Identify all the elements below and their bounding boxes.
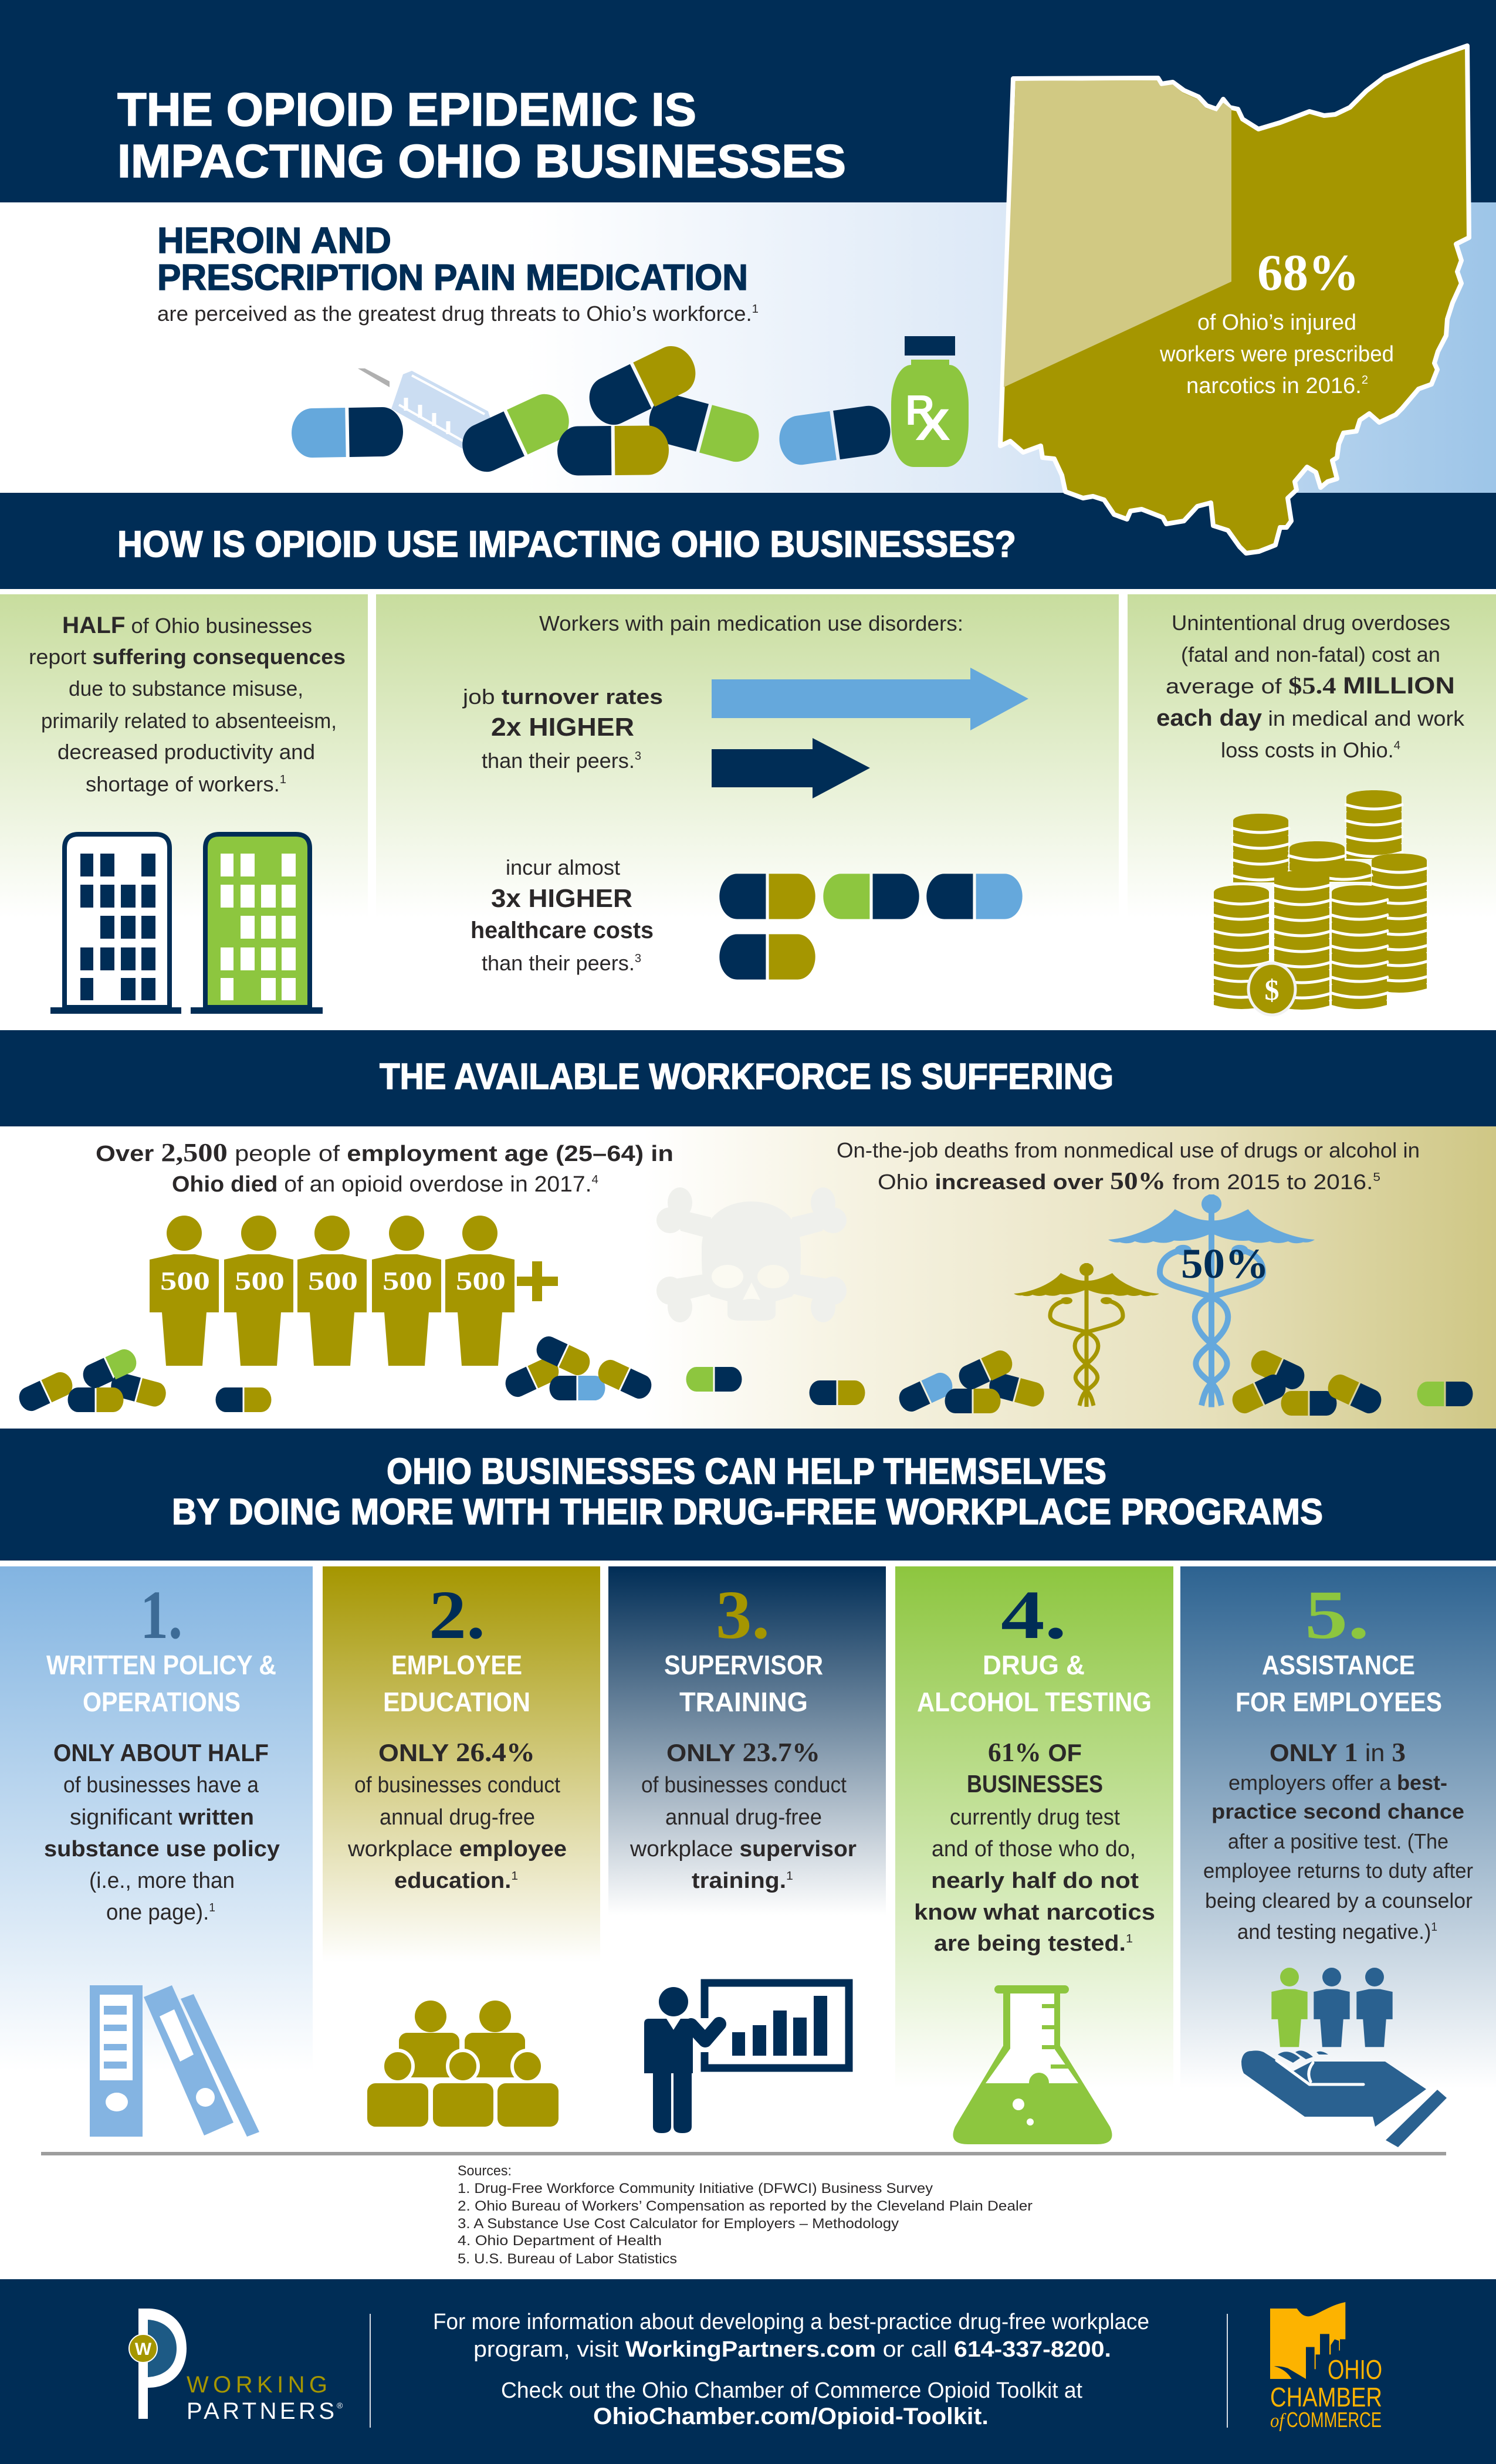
text: contact information: For more information about developing a best-practice drug-free workplace bbox=[433, 2310, 1149, 2334]
logo: Working Partners bbox=[129, 2309, 343, 2424]
logo: Working Partners: PARTNERS bbox=[187, 2398, 334, 2424]
background: impact heading band bbox=[0, 493, 1496, 589]
logo: Ohio Chamber of Commerce: OHIO bbox=[1328, 2354, 1382, 2385]
number: 3: 3. bbox=[716, 1576, 770, 1653]
text: on-the-job deaths: Ohio increased over 50% from 2015 to 2016. bbox=[878, 1168, 1349, 1195]
text: half of Ohio businesses bbox=[29, 612, 346, 796]
text: only about half: ONLY ABOUT HALF bbox=[53, 1739, 269, 1766]
text: sources: 2. Ohio Bureau of Workers’ Compensation as reported by the Cleveland Plain Dealer bbox=[458, 2198, 1033, 2214]
logo: Ohio Chamber of Commerce: COMMERCE bbox=[1287, 2408, 1382, 2432]
text: contact information: Check out the Ohio Chamber of Commerce Opioid Toolkit at bbox=[501, 2378, 1082, 2403]
text: only 23.7 percent: ONLY 23.7% bbox=[666, 1737, 820, 1767]
text: 61 percent of businesses: 61% OF bbox=[988, 1737, 1082, 1767]
text: contact information: OhioChamber.com/Opioid-Toolkit. bbox=[593, 2404, 989, 2429]
text: sources: 4. Ohio Department of Health bbox=[458, 2233, 662, 2249]
icon: prescription bottle: R bbox=[905, 387, 935, 434]
text: overdose cost: each day in medical and work bbox=[1156, 705, 1465, 731]
text: only 23.7 percent: workplace supervisor bbox=[629, 1837, 857, 1861]
heading: how is opioid use impacting: HOW IS OPIOID USE IMPACTING OHIO BUSINESSES? bbox=[117, 524, 1016, 565]
icon: pill beside bottle bbox=[776, 403, 893, 468]
logo: Ohio Chamber of Commerce bbox=[1270, 2302, 1382, 2432]
text: only 23.7 percent: annual drug-free bbox=[665, 1805, 822, 1830]
text: turnover rates: 2x HIGHER bbox=[491, 713, 634, 742]
heading: employee education: EDUCATION bbox=[383, 1687, 530, 1717]
logo: Working Partners: W bbox=[135, 2340, 152, 2359]
text: over 2,500 people died: 4 bbox=[592, 1173, 598, 1186]
title bbox=[117, 83, 846, 187]
heading: written policy bbox=[46, 1650, 276, 1717]
text: on-the-job deaths: 5 bbox=[1373, 1171, 1380, 1184]
heading: Ohio businesses can help themselves: BY DOING MORE WITH THEIR DRUG-FREE WORKPLACE PROGRAMS bbox=[172, 1492, 1323, 1532]
text: turnover rates: job turnover rates bbox=[462, 685, 663, 709]
icon: three people on a hand bbox=[1241, 1968, 1447, 2147]
text: contact information: program, visit WorkingPartners.com or call 614-337-8200. bbox=[473, 2337, 1111, 2362]
text: only about half: of businesses have a bbox=[63, 1773, 259, 1798]
heading: drug and alcohol testing: ALCOHOL TESTING bbox=[917, 1687, 1152, 1717]
text: only 1 in 3: after a positive test. (The bbox=[1228, 1829, 1448, 1853]
background: workforce heading band bbox=[0, 1030, 1496, 1126]
map: Ohio 68 percent: of Ohio’s injured bbox=[1197, 310, 1356, 335]
text: over 2,500 people died: Over 2,500 people of employment age (25–64) in bbox=[96, 1138, 673, 1167]
number: 2: 2. bbox=[429, 1576, 485, 1653]
icon: group of pills bbox=[291, 339, 764, 479]
logo: Working Partners: WORKING bbox=[187, 2372, 327, 2398]
background: heroin section gradient bbox=[0, 202, 1496, 493]
map: Ohio 68 percent: 68% bbox=[1257, 245, 1359, 302]
text: 61 percent of businesses: 1 bbox=[1126, 1932, 1133, 1945]
text: half of Ohio businesses: report suffering consequences bbox=[29, 645, 346, 669]
text: overdose cost: average of $5.4 MILLION bbox=[1166, 672, 1455, 699]
text: only 1 in 3: practice second chance bbox=[1211, 1799, 1464, 1823]
text: 61 percent of businesses: and of those who do, bbox=[932, 1837, 1136, 1861]
heading: assistance for employees bbox=[1236, 1650, 1442, 1717]
icon: olive caduceus bbox=[1014, 1263, 1159, 1407]
icon: person 500 bbox=[224, 1216, 293, 1366]
text: only 26.4 percent: education. bbox=[394, 1869, 511, 1893]
map: Ohio 68 percent: 2 bbox=[1362, 374, 1368, 387]
map: Ohio 68 percent: narcotics in 2016. bbox=[1186, 374, 1361, 398]
text: healthcare costs: healthcare costs bbox=[471, 918, 654, 943]
text: sources: Sources: bbox=[458, 2163, 512, 2179]
logo: Working Partners: ® bbox=[337, 2401, 343, 2410]
heading: supervisor training bbox=[664, 1650, 823, 1717]
icon: laboratory flask bbox=[953, 1985, 1112, 2144]
text: 61 percent of businesses: currently drug test bbox=[950, 1805, 1120, 1830]
icon: person 500: 500 bbox=[383, 1267, 432, 1295]
heading: employee education: EMPLOYEE bbox=[391, 1650, 522, 1680]
text: turnover rates: 3 bbox=[635, 750, 641, 763]
divider right bbox=[1227, 2314, 1228, 2428]
text: sources: 5. U.S. Bureau of Labor Statistics bbox=[458, 2251, 677, 2267]
text: only 23.7 percent: training. bbox=[692, 1869, 786, 1893]
icon: scattered pills middle bbox=[502, 1333, 865, 1405]
text: only about half bbox=[44, 1739, 280, 1925]
heading: supervisor training: TRAINING bbox=[679, 1687, 808, 1717]
panel: 3 supervisor training bbox=[608, 1566, 886, 2133]
text: sources: 3. A Substance Use Cost Calculator for Employers – Methodology bbox=[458, 2216, 899, 2232]
chart: five people each representing 500 bbox=[150, 1216, 558, 1366]
icon: plus sign bbox=[517, 1261, 558, 1301]
divider line above sources bbox=[41, 2152, 1446, 2155]
text: only 23.7 percent bbox=[629, 1737, 857, 1893]
text: on-the-job deaths bbox=[837, 1138, 1420, 1195]
heading: heroin and prescription pain medication: HEROIN AND bbox=[157, 221, 391, 261]
text: only 1 in 3: and testing negative.) bbox=[1237, 1920, 1439, 1944]
text: turnover rates: than their peers. bbox=[482, 749, 634, 773]
text: overdose cost: (fatal and non-fatal) cost an bbox=[1181, 642, 1440, 666]
arrow: light blue long arrow bbox=[712, 668, 1028, 730]
icon: presenter at chart board bbox=[644, 1983, 849, 2133]
text: only 26.4 percent: ONLY 26.4% bbox=[378, 1737, 535, 1767]
icon: scattered pills far right bbox=[1228, 1347, 1473, 1417]
text: only 23.7 percent: of businesses conduct bbox=[641, 1773, 847, 1798]
text: only 1 in 3: employers offer a best- bbox=[1228, 1771, 1447, 1795]
text: half of Ohio businesses: shortage of workers. bbox=[86, 772, 277, 796]
text: only about half: (i.e., more than bbox=[89, 1869, 235, 1893]
panel: workers with pain medication use disorders bbox=[376, 594, 1119, 918]
icon: stacks of coins: $ bbox=[1265, 973, 1279, 1006]
number: 4: 4. bbox=[1001, 1576, 1067, 1653]
text: drug threats subheading: are perceived as the greatest drug threats to Ohio’s workforce. bbox=[157, 302, 742, 326]
text: on-the-job deaths: On-the-job deaths from nonmedical use of drugs or alcohol in bbox=[837, 1138, 1420, 1162]
text: half of Ohio businesses: HALF of Ohio businesses bbox=[62, 612, 312, 638]
heading: Ohio businesses can help themselves: OHIO BUSINESSES CAN HELP THEMSELVES bbox=[387, 1451, 1106, 1492]
text: only about half: one page). bbox=[106, 1900, 213, 1925]
title: IMPACTING OHIO BUSINESSES bbox=[117, 135, 846, 187]
panel: 4 drug and alcohol testing bbox=[895, 1566, 1173, 2144]
heading: supervisor training: SUPERVISOR bbox=[664, 1650, 823, 1680]
heading: assistance for employees: ASSISTANCE bbox=[1262, 1650, 1415, 1680]
footer bbox=[0, 2279, 1496, 2464]
logo: Ohio Chamber of Commerce: CHAMBER bbox=[1270, 2382, 1382, 2412]
icon: person 500 bbox=[297, 1216, 367, 1366]
text: over 2,500 people died bbox=[96, 1138, 673, 1197]
icon: audience of people bbox=[367, 2001, 559, 2127]
text: only 1 in 3 bbox=[1203, 1737, 1473, 1944]
background: programs heading band bbox=[0, 1429, 1496, 1561]
map: Ohio 68 percent: workers were prescribed bbox=[1159, 342, 1394, 367]
heading: Ohio businesses can help themselves bbox=[172, 1451, 1323, 1532]
text: only about half: substance use policy bbox=[44, 1837, 280, 1861]
arrow: navy short arrow bbox=[712, 738, 870, 798]
text: over 2,500 people died: Ohio died of an opioid overdose in 2017. bbox=[172, 1172, 583, 1197]
icon: person 500 bbox=[445, 1216, 515, 1366]
background: top navy band bbox=[0, 0, 1496, 202]
icon: person 500: 500 bbox=[456, 1267, 506, 1295]
text: sources bbox=[458, 2163, 1033, 2267]
text: healthcare costs: 3 bbox=[635, 952, 641, 965]
text: healthcare costs bbox=[471, 855, 654, 975]
heading: the available workforce is suffering: THE AVAILABLE WORKFORCE IS SUFFERING bbox=[380, 1057, 1113, 1097]
panel: 1 written policy and operations bbox=[0, 1566, 313, 2137]
icon: prescription bottle bbox=[891, 336, 969, 467]
text: drug threats subheading: 1 bbox=[752, 303, 759, 316]
text: 61 percent of businesses: BUSINESSES bbox=[967, 1770, 1103, 1798]
panel: half of businesses bbox=[0, 594, 368, 918]
panel: 5 assistance for employees bbox=[1180, 1566, 1496, 2147]
map: Ohio 68 percent bbox=[1000, 46, 1469, 553]
text: contact information bbox=[433, 2310, 1149, 2429]
text: only 1 in 3: being cleared by a counselor bbox=[1205, 1888, 1473, 1913]
text: overdose cost: loss costs in Ohio. bbox=[1221, 738, 1392, 762]
text: healthcare costs: incur almost bbox=[506, 855, 620, 879]
text: only 1 in 3: ONLY 1 in 3 bbox=[1270, 1737, 1406, 1767]
text: only 26.4 percent: workplace employee bbox=[347, 1837, 567, 1861]
text: half of Ohio businesses: decreased productivity and bbox=[57, 740, 315, 764]
heading: employee education bbox=[383, 1650, 530, 1717]
icon: person 500: 500 bbox=[235, 1267, 285, 1295]
text: only 23.7 percent: 1 bbox=[786, 1870, 793, 1883]
icon: person 500 bbox=[150, 1216, 219, 1366]
text: only 26.4 percent: of businesses conduct bbox=[354, 1773, 560, 1798]
text: healthcare costs: 3x HIGHER bbox=[491, 884, 632, 913]
heading: heroin and prescription pain medication bbox=[157, 221, 748, 298]
icon: green building bbox=[191, 834, 323, 1014]
text: only about half: 1 bbox=[209, 1901, 215, 1914]
text: overdose cost: Unintentional drug overdoses bbox=[1172, 611, 1450, 635]
heading: drug and alcohol testing: DRUG & bbox=[983, 1650, 1085, 1680]
icon: person 500: 500 bbox=[308, 1267, 358, 1295]
text: half of Ohio businesses: due to substance misuse, bbox=[69, 676, 303, 700]
number: 5: 5. bbox=[1305, 1576, 1369, 1653]
icon: blue caduceus with 50 percent bbox=[1108, 1194, 1315, 1407]
text: only about half: significant written bbox=[70, 1805, 254, 1830]
icon: scattered pills left bbox=[15, 1346, 271, 1414]
heading: heroin and prescription pain medication: PRESCRIPTION PAIN MEDICATION bbox=[157, 258, 748, 298]
heading: written policy: WRITTEN POLICY & bbox=[46, 1650, 276, 1680]
icon: blue caduceus with 50 percent: 50% bbox=[1181, 1240, 1269, 1287]
icon: binders bbox=[90, 1985, 259, 2137]
text: 61 percent of businesses: know what narcotics bbox=[914, 1900, 1155, 1925]
text: only 1 in 3: employee returns to duty after bbox=[1203, 1859, 1473, 1883]
text: only 26.4 percent bbox=[347, 1737, 567, 1893]
text: half of Ohio businesses: primarily related to absenteeism, bbox=[41, 709, 337, 733]
text: sources: 1. Drug-Free Workforce Community Initiative (DFWCI) Business Survey bbox=[458, 2181, 933, 2196]
panel: overdose cost bbox=[1128, 594, 1496, 918]
background: workforce section gradient bbox=[0, 1126, 1496, 1429]
logo: Ohio Chamber of Commerce: of bbox=[1270, 2410, 1287, 2432]
text: 61 percent of businesses bbox=[914, 1737, 1155, 1956]
icon: stacks of coins bbox=[1212, 790, 1429, 1015]
text: 61 percent of businesses: nearly half do not bbox=[931, 1869, 1139, 1893]
text: only 26.4 percent: annual drug-free bbox=[380, 1805, 535, 1830]
text: overdose cost: 4 bbox=[1394, 739, 1400, 752]
icon: navy and white building bbox=[50, 834, 181, 1014]
icon: skull and crossbones bbox=[656, 1187, 847, 1322]
icon: row of pills for healthcare cost bbox=[719, 874, 1023, 980]
text: 61 percent of businesses: are being tested. bbox=[934, 1931, 1126, 1956]
text: overdose cost bbox=[1156, 611, 1465, 762]
text: only 1 in 3: 1 bbox=[1431, 1921, 1437, 1934]
heading: assistance for employees: FOR EMPLOYEES bbox=[1236, 1687, 1442, 1717]
divider left bbox=[370, 2314, 371, 2428]
text: workers heading: Workers with pain medication use disorders: bbox=[539, 611, 963, 635]
icon: person 500: 500 bbox=[160, 1267, 210, 1295]
number: 1: 1. bbox=[140, 1576, 182, 1653]
heading: written policy: OPERATIONS bbox=[83, 1687, 241, 1717]
panel: 2 employee education bbox=[323, 1566, 600, 2127]
icon: prescription bottle: X bbox=[915, 400, 950, 450]
icon: scattered pills right of centre bbox=[895, 1347, 1047, 1415]
text: half of Ohio businesses: 1 bbox=[280, 773, 286, 786]
text: turnover rates bbox=[462, 685, 663, 773]
title: THE OPIOID EPIDEMIC IS bbox=[117, 83, 696, 136]
text: healthcare costs: than their peers. bbox=[482, 951, 634, 975]
text: only 26.4 percent: 1 bbox=[511, 1870, 518, 1883]
icon: syringe bbox=[358, 368, 492, 451]
heading: drug and alcohol testing bbox=[917, 1650, 1152, 1717]
icon: person 500 bbox=[372, 1216, 441, 1366]
